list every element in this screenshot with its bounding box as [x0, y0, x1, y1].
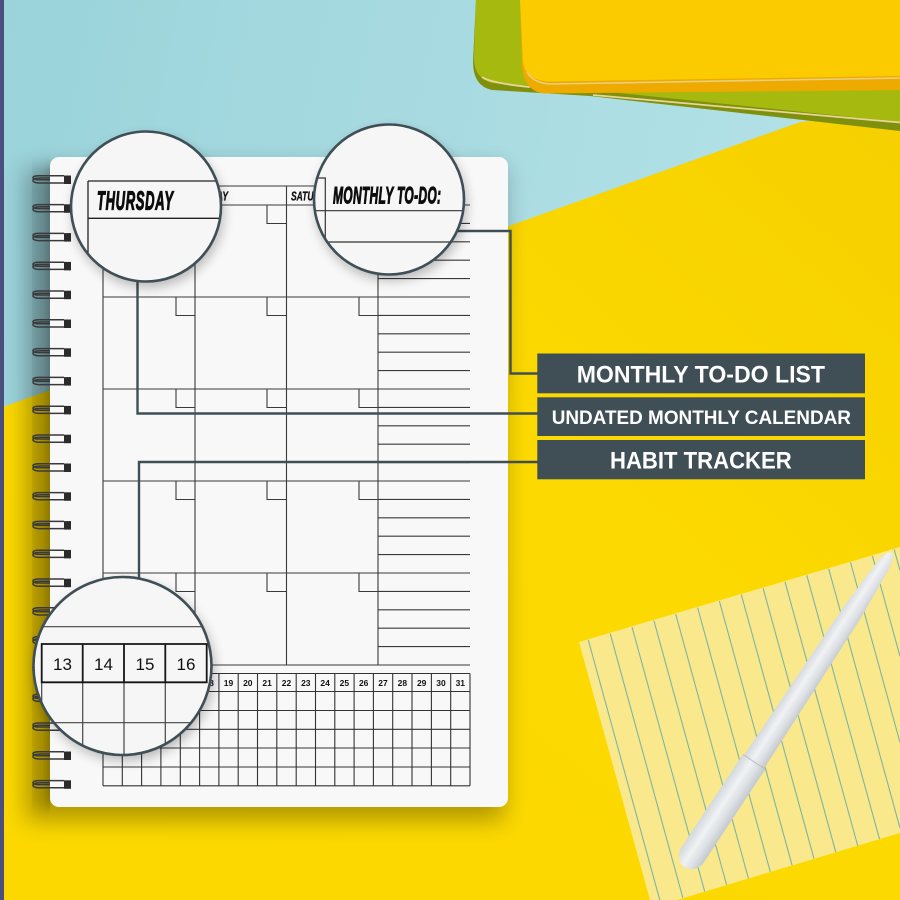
monthly calendar grid — [103, 186, 470, 665]
Thursday heading: THURSDAY — [97, 187, 174, 216]
connector: habit tracker — [139, 462, 538, 580]
habit tracker day numbers — [204, 678, 465, 688]
habit tracker day numbers: 27 — [378, 678, 388, 688]
magnifier: monthly to-do — [310, 124, 470, 280]
date boxes — [176, 205, 378, 592]
Friday header: FRIDAY — [197, 188, 229, 204]
habit tracker day numbers: 24 — [320, 678, 330, 688]
habit tracker day numbers: 21 — [262, 678, 272, 688]
habit tracker day numbers: 25 — [340, 678, 349, 688]
Monthly To-Do heading: MONTHLY TO-DO: — [333, 183, 441, 210]
label: monthly to-do list — [537, 354, 865, 393]
magnifier: habit tracker dates — [30, 577, 215, 760]
label: monthly to-do list: MONTHLY TO-DO LIST — [577, 361, 825, 388]
label: habit tracker: HABIT TRACKER — [610, 447, 792, 474]
pen — [673, 546, 900, 874]
date numbers: 14 — [94, 655, 113, 674]
notebook shadow — [26, 166, 504, 820]
date numbers — [53, 655, 195, 674]
left edge strip — [0, 0, 4, 900]
habit tracker day numbers: 31 — [456, 678, 465, 688]
date numbers: 13 — [53, 655, 72, 674]
weekday headers — [197, 188, 338, 204]
sticky note pad with ruled lines — [579, 547, 900, 900]
label: undated monthly calendar — [537, 397, 865, 436]
stacked notebooks — [473, 0, 900, 131]
date numbers: 15 — [136, 655, 154, 674]
habit tracker day numbers: 18 — [204, 678, 214, 688]
habit tracker day numbers: 19 — [224, 678, 233, 688]
magnifier: Thursday — [71, 132, 225, 287]
calendar column and row lines — [103, 186, 378, 665]
connector: undated calendar — [138, 275, 538, 414]
habit tracker day numbers: 29 — [417, 678, 427, 688]
label: habit tracker — [537, 440, 865, 479]
habit tracker day numbers: 26 — [359, 678, 369, 688]
connector: monthly to-do — [456, 231, 538, 374]
green notebook — [473, 0, 900, 131]
habit tracker day numbers: 28 — [398, 678, 407, 688]
habit tracker day numbers: 20 — [243, 678, 253, 688]
Saturday header: SATURDAY — [291, 188, 338, 204]
label: undated monthly calendar: UNDATED MONTHLY CALENDAR — [552, 407, 851, 429]
habit tracker day numbers: 22 — [282, 678, 291, 688]
habit tracker day numbers: 30 — [436, 678, 446, 688]
yellow notebook — [520, 0, 900, 94]
notebook page — [50, 157, 508, 807]
habit tracker grid — [103, 674, 470, 786]
monthly to-do ruled lines — [378, 205, 470, 665]
date numbers: 16 — [177, 655, 195, 674]
spiral binding — [33, 176, 71, 789]
habit tracker day numbers: 23 — [301, 678, 311, 688]
